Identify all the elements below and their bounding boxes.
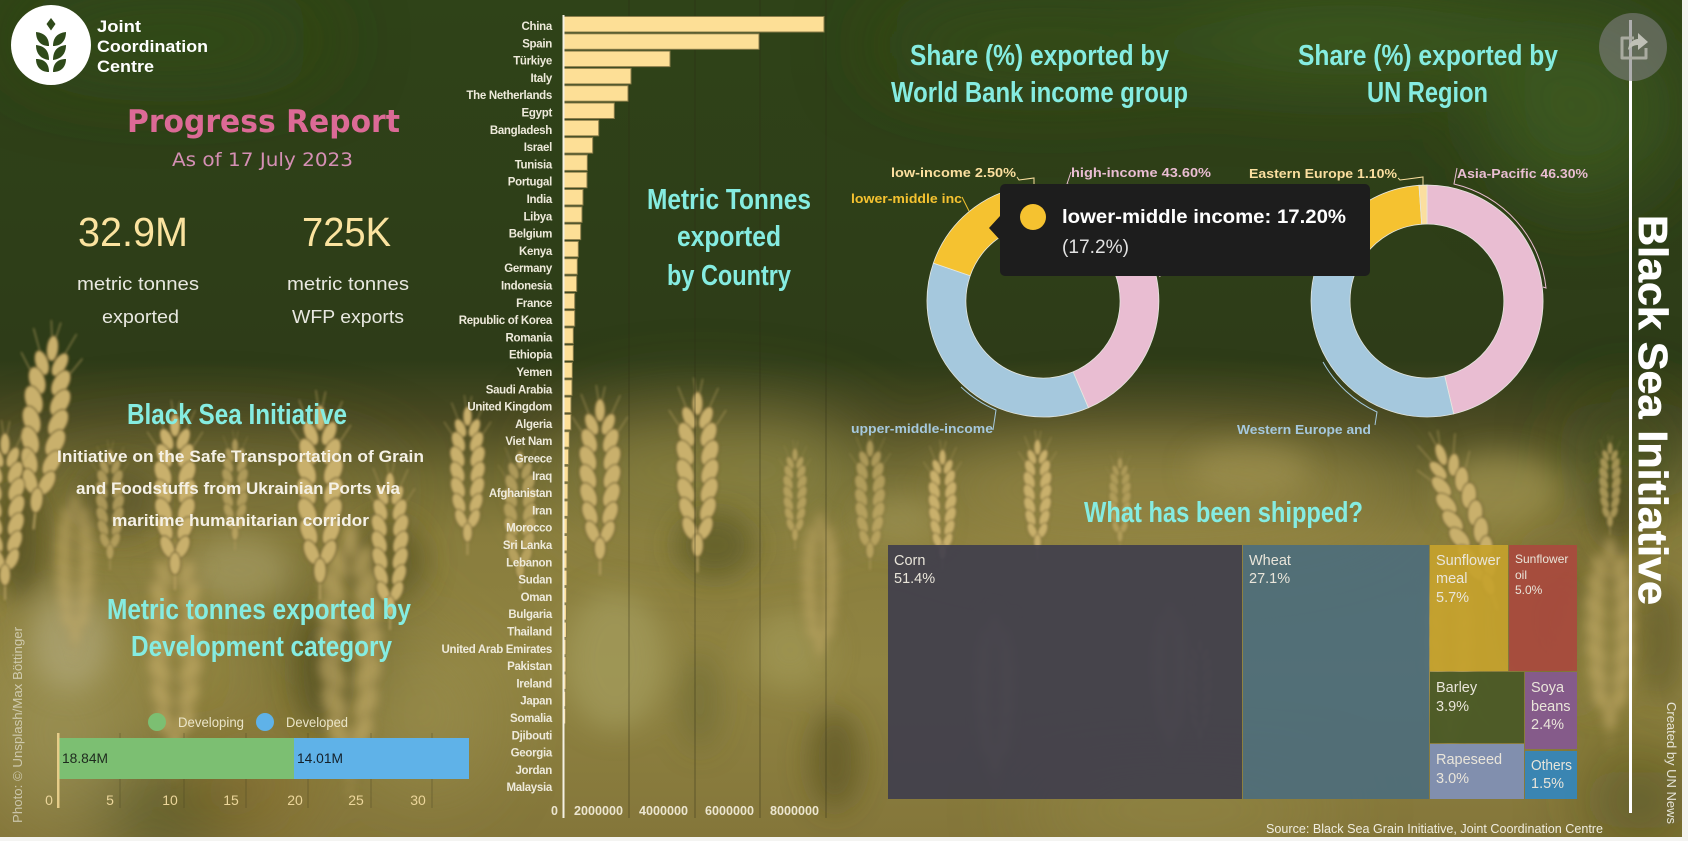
source note: Source: Black Sea Grain Initiative, Joint Coordination Centre (1266, 821, 1603, 836)
country labels: Italy (530, 73, 553, 85)
country labels: Republic of Korea (459, 315, 553, 327)
title: Progress Report: Progress Report (127, 104, 400, 140)
treemap cell: Sunflower oil: Sunflower (1515, 552, 1568, 566)
country labels: Sri Lanka (503, 540, 553, 552)
country labels: Germany (504, 263, 553, 275)
country labels: Greece (515, 454, 552, 466)
country labels: Jordan (515, 765, 552, 777)
vertical title: Black Sea Initiative: Black Sea Initiative (1630, 215, 1676, 605)
tooltip: lower-middle income (989, 184, 1370, 276)
country labels: Türkiye (513, 56, 552, 68)
country labels: Morocco (506, 523, 552, 535)
legend: Developed (286, 714, 348, 730)
donut chart: UN Region: Eastern Europe 1.10% (1249, 166, 1397, 181)
country labels: Thailand (507, 626, 552, 638)
country labels: Georgia (511, 748, 553, 760)
country labels: Romania (506, 332, 553, 344)
treemap cell: Soya beans: Soya (1531, 680, 1565, 696)
stacked bar chart: development category: 25 (348, 792, 364, 808)
treemap cell: Others: Others (1531, 758, 1572, 774)
logo: Joint Coordination Centre: Joint (97, 17, 141, 36)
country labels: Viet Nam (505, 436, 552, 448)
treemap cell: Rapeseed: Rapeseed (1436, 752, 1502, 768)
country labels: India (527, 194, 553, 206)
country labels: China (522, 21, 553, 33)
treemap cell: Barley: Barley (1436, 680, 1478, 696)
country labels: Indonesia (501, 280, 553, 292)
donut chart: World Bank income group: high-income 43.60% (1071, 165, 1211, 180)
bars (564, 16, 824, 724)
bar chart: metric tonnes by country (441, 0, 826, 818)
treemap cell: Sunflower oil (1509, 545, 1577, 671)
stacked bar chart: development category: 10 (162, 792, 178, 808)
logo: Joint Coordination Centre: Centre (97, 57, 154, 76)
country labels: Libya (523, 211, 553, 223)
tooltip: lower-middle income: (17.2%) (1062, 237, 1129, 258)
country labels: Bulgaria (508, 609, 553, 621)
text block: initiative description: Initiative on the Safe Transportation of Grain (57, 447, 424, 466)
heading: Metric Tonnes exported by Country: by Country (667, 260, 791, 292)
stacked bar chart: development category (45, 713, 469, 808)
country labels: Yemen (516, 367, 552, 379)
treemap cell: Barley: 3.9% (1436, 699, 1469, 715)
value axis labels: 2000000 (574, 804, 623, 818)
stacked bar chart: development category: 5 (106, 792, 114, 808)
photo credit: Photo: © Unsplash/Max Böttinger (10, 626, 25, 823)
treemap cell: Rapeseed: 3.0% (1436, 771, 1469, 787)
country labels: Spain (522, 38, 552, 50)
treemap cell: Others (1525, 751, 1577, 799)
country labels: Belgium (509, 229, 552, 241)
treemap cell: Soya beans: 2.4% (1531, 717, 1564, 733)
heading: Share exported by UN Region (1298, 40, 1558, 109)
donut chart: World Bank income group: upper-middle-income (851, 421, 993, 436)
country labels: Bangladesh (490, 125, 552, 137)
country labels: Sudan (518, 575, 552, 587)
heading: Metric Tonnes exported by Country (647, 184, 811, 292)
treemap cell: Barley (1430, 672, 1524, 743)
stat: 32.9M metric tonnes exported: metric tonnes (77, 274, 199, 294)
heading: Metric Tonnes exported by Country: exported (677, 221, 781, 253)
country labels: Kenya (519, 246, 553, 258)
stacked bar chart: development category: 15 (223, 792, 239, 808)
stacked bar chart: development category: 18.84M (62, 750, 108, 766)
heading: What has been shipped?: What has been shipped? (1084, 497, 1363, 529)
value axis labels (551, 804, 819, 818)
stacked bar chart: development category: 30 (410, 792, 426, 808)
logo: Joint Coordination Centre: Coordination (97, 37, 208, 56)
country labels: Israel (524, 142, 552, 154)
treemap cell: Corn: 51.4% (894, 571, 935, 587)
heading: Metric tonnes exported by Development category (107, 594, 411, 663)
legend (148, 713, 348, 731)
value axis labels: 6000000 (705, 804, 754, 818)
donut chart: UN Region: Asia-Pacific 46.30% (1457, 166, 1588, 181)
country labels: Egypt (522, 108, 552, 120)
stacked bar chart: development category: 20 (287, 792, 303, 808)
value axis labels: 0 (551, 804, 558, 818)
heading: Metric Tonnes exported by Country: Metric Tonnes (647, 184, 811, 216)
stat: 32.9M metric tonnes exported (77, 209, 199, 327)
vertical rule (1629, 20, 1632, 813)
icon: share button (1599, 13, 1667, 81)
treemap cell: Rapeseed (1430, 744, 1524, 799)
text block: initiative description: and Foodstuffs from Ukrainian Ports via (76, 479, 401, 498)
title: Progress Report: As of 17 July 2023 (172, 149, 353, 171)
country labels: Ethiopia (509, 350, 553, 362)
country labels: Iraq (532, 471, 552, 483)
treemap cell: Wheat (1243, 545, 1429, 799)
country labels: Saudi Arabia (486, 384, 553, 396)
stat: 32.9M metric tonnes exported: 32.9M (78, 209, 188, 255)
tooltip: lower-middle income: lower-middle income: 17.20% (1062, 207, 1346, 228)
country labels: Portugal (508, 177, 552, 189)
country labels: Algeria (515, 419, 553, 431)
treemap cell: Sunflower meal (1430, 545, 1508, 671)
stat: 725K metric tonnes WFP exports: metric tonnes (287, 274, 409, 294)
treemap cell: Corn: Corn (894, 553, 925, 569)
country labels: Tunisia (515, 159, 553, 171)
title: Progress Report (127, 104, 400, 171)
country labels: Afghanistan (489, 488, 552, 500)
country labels (441, 21, 553, 794)
country labels: Somalia (510, 713, 553, 725)
legend: Developing (178, 714, 244, 730)
text block: initiative description (57, 447, 424, 530)
donut chart: UN Region (1237, 166, 1588, 437)
country labels: Djibouti (512, 730, 552, 742)
country labels: Oman (521, 592, 552, 604)
country labels: France (516, 298, 552, 310)
treemap cell: Sunflower oil: 5.0% (1515, 583, 1543, 597)
heading: Share exported by UN Region: Share (%) exported by (1298, 40, 1558, 72)
treemap cell: Sunflower meal: Sunflower (1436, 553, 1501, 569)
treemap cell: Wheat: 27.1% (1249, 571, 1290, 587)
stat: 725K metric tonnes WFP exports (287, 209, 409, 327)
stat: 32.9M metric tonnes exported: exported (102, 307, 179, 327)
stat: 725K metric tonnes WFP exports: WFP exports (292, 307, 404, 327)
stacked bar chart: development category: 14.01M (297, 750, 343, 766)
treemap cell: Corn (888, 545, 1242, 799)
treemap cell: Sunflower oil: oil (1515, 568, 1527, 582)
donut chart: World Bank income group: low-income 2.50% (891, 165, 1016, 180)
country labels: Iran (532, 505, 552, 517)
heading: Share exported by UN Region: UN Region (1367, 77, 1488, 109)
country labels: United Arab Emirates (441, 644, 552, 656)
donut chart: World Bank income group (851, 165, 1211, 436)
treemap cell: Others: 1.5% (1531, 776, 1564, 792)
heading: Black Sea Initiative: Black Sea Initiative (127, 399, 347, 431)
country labels: Pakistan (507, 661, 552, 673)
country labels: Lebanon (506, 557, 552, 569)
treemap cell: Wheat: Wheat (1249, 553, 1291, 569)
country labels: The Netherlands (466, 90, 552, 102)
country labels: Ireland (516, 678, 552, 690)
stacked bar chart: development category: 0 (45, 792, 53, 808)
country labels: Malaysia (506, 782, 553, 794)
donut chart: UN Region: Western Europe and (1237, 422, 1371, 437)
credit: Created by UN News: Created by UN News (1664, 702, 1679, 824)
heading: Metric tonnes exported by Development category: Metric tonnes exported by (107, 594, 411, 626)
treemap cell: Sunflower meal: 5.7% (1436, 590, 1469, 606)
value axis labels: 8000000 (770, 804, 819, 818)
treemap cell: Soya beans (1525, 672, 1577, 749)
donut chart: World Bank income group: lower-middle inc (851, 191, 962, 206)
heading: Share exported by World Bank income group: Share (%) exported by (910, 40, 1169, 72)
country labels: Japan (520, 696, 552, 708)
logo: Joint Coordination Centre (11, 5, 208, 85)
heading: Share exported by World Bank income group (891, 40, 1188, 109)
value axis labels: 4000000 (639, 804, 688, 818)
country labels: United Kingdom (467, 402, 552, 414)
stat: 725K metric tonnes WFP exports: 725K (302, 209, 391, 255)
treemap: what has been shipped (888, 545, 1577, 799)
text block: initiative description: maritime humanitarian corridor (112, 511, 369, 530)
heading: Metric tonnes exported by Development category: Development category (131, 631, 392, 663)
treemap cell: Soya beans: beans (1531, 699, 1571, 715)
heading: Share exported by World Bank income group: World Bank income group (891, 77, 1188, 109)
treemap cell: Sunflower meal: meal (1436, 571, 1467, 587)
